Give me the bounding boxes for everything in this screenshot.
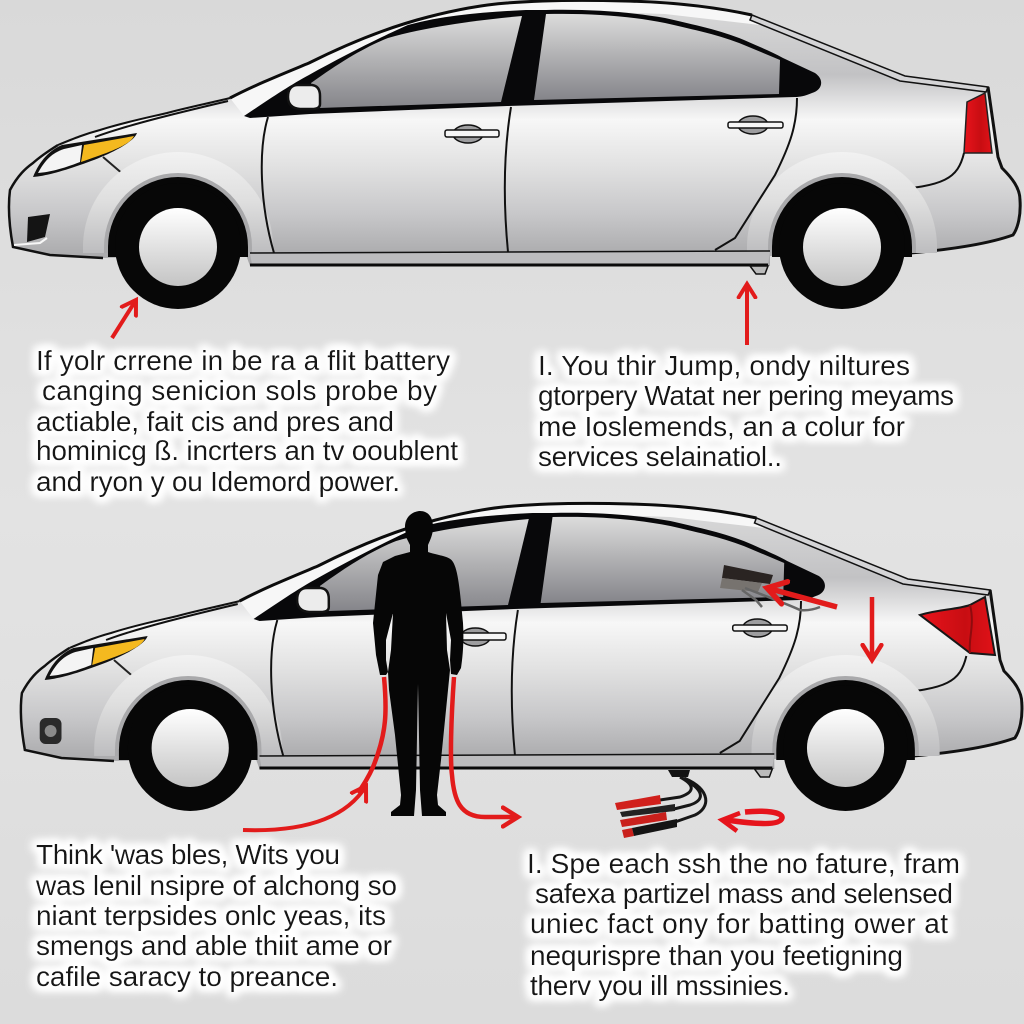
car: top side view bbox=[9, 0, 1020, 309]
bumper lip bbox=[14, 238, 47, 245]
rear trim band bbox=[754, 518, 990, 595]
text block: bottom left: was lenil nsipre of alchong so bbox=[35, 870, 397, 901]
front wheel bbox=[128, 685, 253, 811]
front nose outline bbox=[21, 648, 114, 761]
text block: top right: services selainatiol.. bbox=[538, 441, 782, 472]
rear wheel arch bbox=[747, 152, 937, 257]
person silhouette bbox=[373, 511, 463, 816]
text block: top left: If yolr crrene in be ra a flit battery bbox=[36, 345, 450, 376]
rear bumper outline bbox=[913, 590, 1022, 756]
text block: top left: and ryon y ou Idemord power. bbox=[36, 466, 400, 497]
door lines bbox=[262, 98, 797, 253]
jumper cables bbox=[615, 770, 706, 838]
text block: bottom left bbox=[35, 839, 397, 992]
car body bbox=[21, 503, 1022, 769]
door handles bbox=[445, 116, 783, 143]
text block: bottom left: Think 'was bles, Wits you bbox=[36, 839, 340, 870]
front window bbox=[311, 16, 522, 108]
rocker sill bbox=[260, 754, 774, 777]
mirror bbox=[288, 85, 320, 109]
clamp on car window bbox=[720, 565, 820, 610]
front wheel bbox=[115, 183, 241, 309]
rear wheel arch bbox=[752, 655, 940, 760]
text block: top left: actiable, fait cis and pres and bbox=[36, 406, 394, 437]
window frame bbox=[244, 10, 821, 118]
front window bbox=[320, 519, 529, 611]
text block: bottom right bbox=[527, 848, 960, 1001]
rear trim band bbox=[750, 15, 988, 92]
arrow: front wheel bbox=[112, 300, 136, 338]
hood line bbox=[58, 98, 230, 145]
car body bbox=[9, 0, 1020, 266]
rear wheel bbox=[783, 685, 908, 811]
rear window bbox=[541, 517, 784, 603]
red cable: left with arrow bbox=[243, 786, 366, 830]
text block: bottom left: niant terpsides onlc yeas, its bbox=[36, 900, 386, 931]
roof strip bbox=[240, 503, 764, 619]
car: bottom side view bbox=[21, 503, 1022, 811]
tail light: bottom car bbox=[920, 597, 995, 655]
text block: bottom right: safexa partizel mass and selensed bbox=[535, 878, 953, 909]
mirror bbox=[297, 588, 329, 612]
bumper vent bbox=[40, 718, 62, 744]
arrow: sill bbox=[745, 284, 749, 345]
text block: top left: canging senicion sols probe by bbox=[42, 375, 437, 406]
front wheel arch bbox=[94, 655, 282, 760]
red cable: right hand with arrow bbox=[451, 677, 518, 817]
text block: top right bbox=[538, 350, 954, 472]
text block: top right: gtorpery Watat ner pering meyams bbox=[538, 380, 954, 411]
roof outline bbox=[240, 503, 756, 601]
front wheel arch bbox=[83, 152, 273, 257]
fender crease bbox=[114, 660, 149, 690]
bumper vent bbox=[27, 214, 50, 242]
door lines bbox=[271, 601, 801, 756]
text block: top right: me Ioslemends, an a colur for bbox=[538, 411, 905, 442]
text block: top left bbox=[36, 345, 458, 497]
door handles bbox=[453, 619, 787, 646]
front nose outline bbox=[9, 145, 103, 258]
rear bumper outline bbox=[910, 87, 1020, 253]
text block: top right: I. You thir Jump, ondy niltures bbox=[538, 350, 910, 381]
text block: bottom right: therv you ill mssinies. bbox=[530, 970, 790, 1001]
roof strip bbox=[230, 0, 760, 116]
hood line bbox=[69, 601, 240, 648]
text block: top left: hominicg ß. incrters an tv ooublent bbox=[36, 435, 458, 466]
text block: bottom left: cafile saracy to preance. bbox=[36, 961, 338, 992]
rocker sill bbox=[250, 251, 770, 274]
text block: bottom right: uniec fact ony for batting ower at bbox=[530, 908, 948, 939]
headlight bbox=[33, 133, 137, 177]
text block: bottom right: nequrispre than you feetigning bbox=[530, 940, 903, 971]
rear crease bbox=[885, 153, 964, 190]
arrow: toward clamp bbox=[767, 588, 837, 607]
text block: bottom right: I. Spe each ssh the no fature, fram bbox=[527, 848, 960, 879]
arrow: looping toward cables bbox=[722, 811, 782, 831]
headlight bbox=[45, 636, 148, 680]
window frame bbox=[254, 513, 825, 621]
rear crease bbox=[888, 656, 966, 693]
rear wheel bbox=[779, 183, 905, 309]
rear window bbox=[534, 14, 780, 100]
arrow: downward bbox=[870, 597, 874, 660]
red cable: left hand bbox=[358, 677, 386, 793]
text block: bottom left: smengs and able thiit ame or bbox=[36, 930, 392, 961]
roof outline bbox=[230, 0, 752, 98]
tail light bbox=[964, 93, 992, 153]
fender crease bbox=[103, 157, 138, 187]
